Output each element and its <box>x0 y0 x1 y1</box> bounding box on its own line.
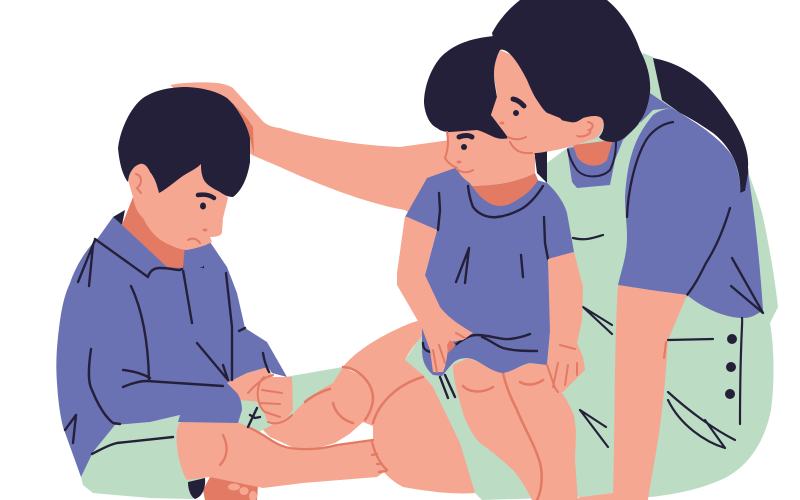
boy: raised shin <box>258 367 376 452</box>
boy: crossed lower leg and shorts <box>81 415 387 500</box>
mother: apron details and buttons <box>573 235 742 448</box>
boy: shirt <box>56 210 287 477</box>
girl: head <box>424 36 547 186</box>
girl: dress <box>405 168 574 398</box>
mother's hand shadow on boy's head <box>233 104 254 155</box>
boy: upper shorts <box>270 367 343 425</box>
boy: hand <box>227 367 293 423</box>
white gap between the legs <box>337 422 373 445</box>
mother: arm <box>575 285 687 500</box>
mother: head <box>491 0 650 153</box>
mother: hair tail <box>653 58 748 193</box>
girl: legs <box>453 358 578 500</box>
boy: leg outlines <box>305 389 353 423</box>
boy: green wedge at ankle <box>236 395 272 434</box>
mother: arm reaching to boy's head <box>170 82 470 216</box>
boy: head <box>118 87 250 270</box>
girl: arms <box>397 216 585 392</box>
mother: shirt <box>618 108 763 318</box>
mother: lower face <box>491 90 580 153</box>
girl: big thigh <box>343 320 475 493</box>
mother: apron <box>405 53 778 500</box>
